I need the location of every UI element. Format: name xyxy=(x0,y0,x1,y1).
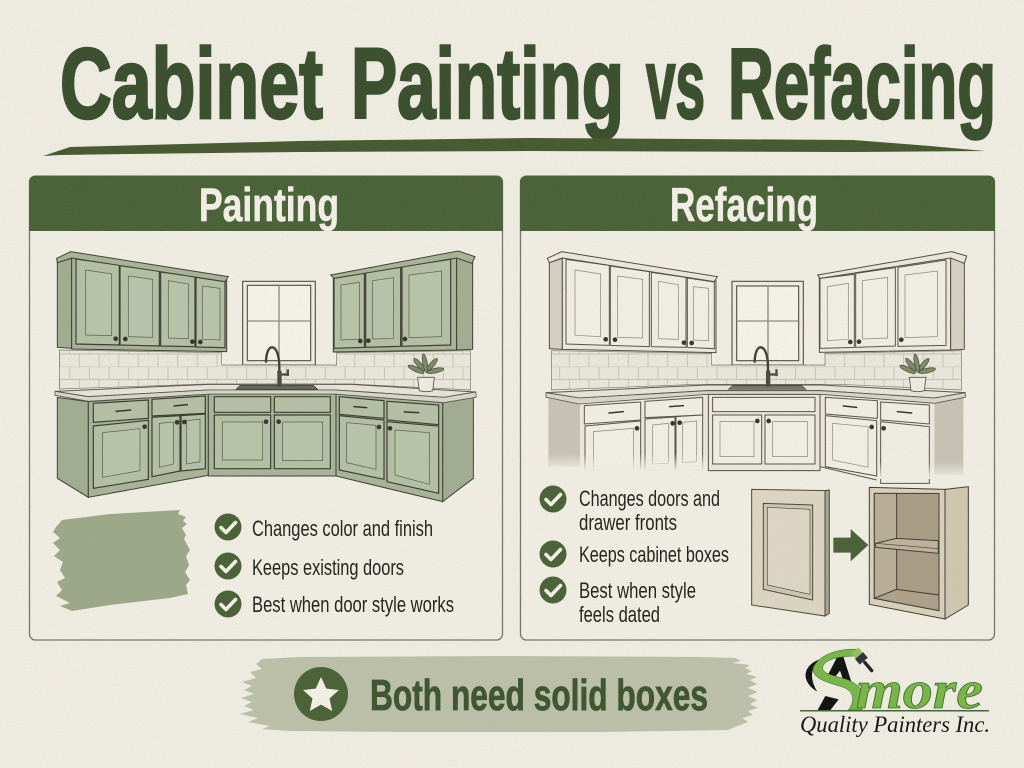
title: Cabinet xyxy=(60,28,323,140)
banner brush stroke xyxy=(240,656,758,732)
faucet xyxy=(266,347,289,387)
checklist: refacing xyxy=(540,486,729,627)
bullet: changes doors: drawer fronts xyxy=(579,510,677,535)
brush stroke underline xyxy=(43,138,985,156)
panel: painting xyxy=(29,176,503,640)
logo underline xyxy=(800,710,989,712)
bullet: changes color xyxy=(214,514,433,541)
logo tagline: Quality Painters Inc. xyxy=(800,712,990,737)
title: Painting xyxy=(351,28,624,140)
bullet: keeps doors: Keeps existing doors xyxy=(252,555,404,580)
base cabinets xyxy=(57,394,473,502)
bullet: best when: Best when style xyxy=(579,578,696,603)
upper cabinets right xyxy=(818,252,967,352)
paintbrush xyxy=(851,647,877,675)
paint swatch xyxy=(53,510,190,611)
arrow xyxy=(833,529,868,561)
bullet: changes doors: Changes doors and xyxy=(579,486,720,511)
bullet: best when: feels dated xyxy=(579,602,660,627)
faucet xyxy=(755,347,778,387)
upper cabinets right xyxy=(331,251,475,352)
painting heading: Painting xyxy=(199,178,339,231)
bullet: changes doors xyxy=(540,486,720,535)
upper cabinets left xyxy=(547,252,717,353)
painting header bar xyxy=(29,176,503,231)
bullet: keeps boxes xyxy=(540,540,729,568)
new door xyxy=(752,489,829,616)
window xyxy=(732,281,803,365)
sink xyxy=(728,386,806,389)
potted plant xyxy=(407,354,444,392)
bullet: best when xyxy=(540,576,696,627)
bullet: best when: Best when door style works xyxy=(252,592,454,617)
refacing header bar xyxy=(520,176,995,231)
bullet: keeps boxes: Keeps cabinet boxes xyxy=(579,542,729,567)
panel: refacing xyxy=(520,176,995,640)
fade overlays xyxy=(546,453,709,471)
potted plant xyxy=(899,354,936,392)
icon: star badge xyxy=(294,667,348,721)
illustration: green painted kitchen xyxy=(55,251,476,502)
logo wordmark: more xyxy=(856,660,983,720)
window xyxy=(243,281,315,365)
checklist: painting xyxy=(214,514,454,618)
logo mark xyxy=(806,647,877,711)
bullet: keeps doors xyxy=(214,552,404,580)
base cabinets fading out xyxy=(546,394,966,483)
illustration: unfinished kitchen xyxy=(546,252,967,483)
bullet: best when xyxy=(214,590,454,618)
refacing heading: Refacing xyxy=(670,178,818,231)
backsplash tiles xyxy=(551,351,961,390)
backsplash tiles xyxy=(59,350,471,390)
sink xyxy=(236,385,318,389)
cabinet box xyxy=(869,487,968,619)
callout banner xyxy=(240,656,758,732)
title: vs xyxy=(646,28,705,140)
bullet: changes color: Changes color and finish xyxy=(252,516,433,541)
illustration: new door to cabinet box xyxy=(752,487,968,619)
countertop xyxy=(55,384,476,403)
logo: Amore Quality Painters xyxy=(800,647,990,737)
upper cabinets left xyxy=(57,252,228,352)
banner text: Both need solid boxes xyxy=(370,671,708,720)
countertop xyxy=(546,385,965,404)
